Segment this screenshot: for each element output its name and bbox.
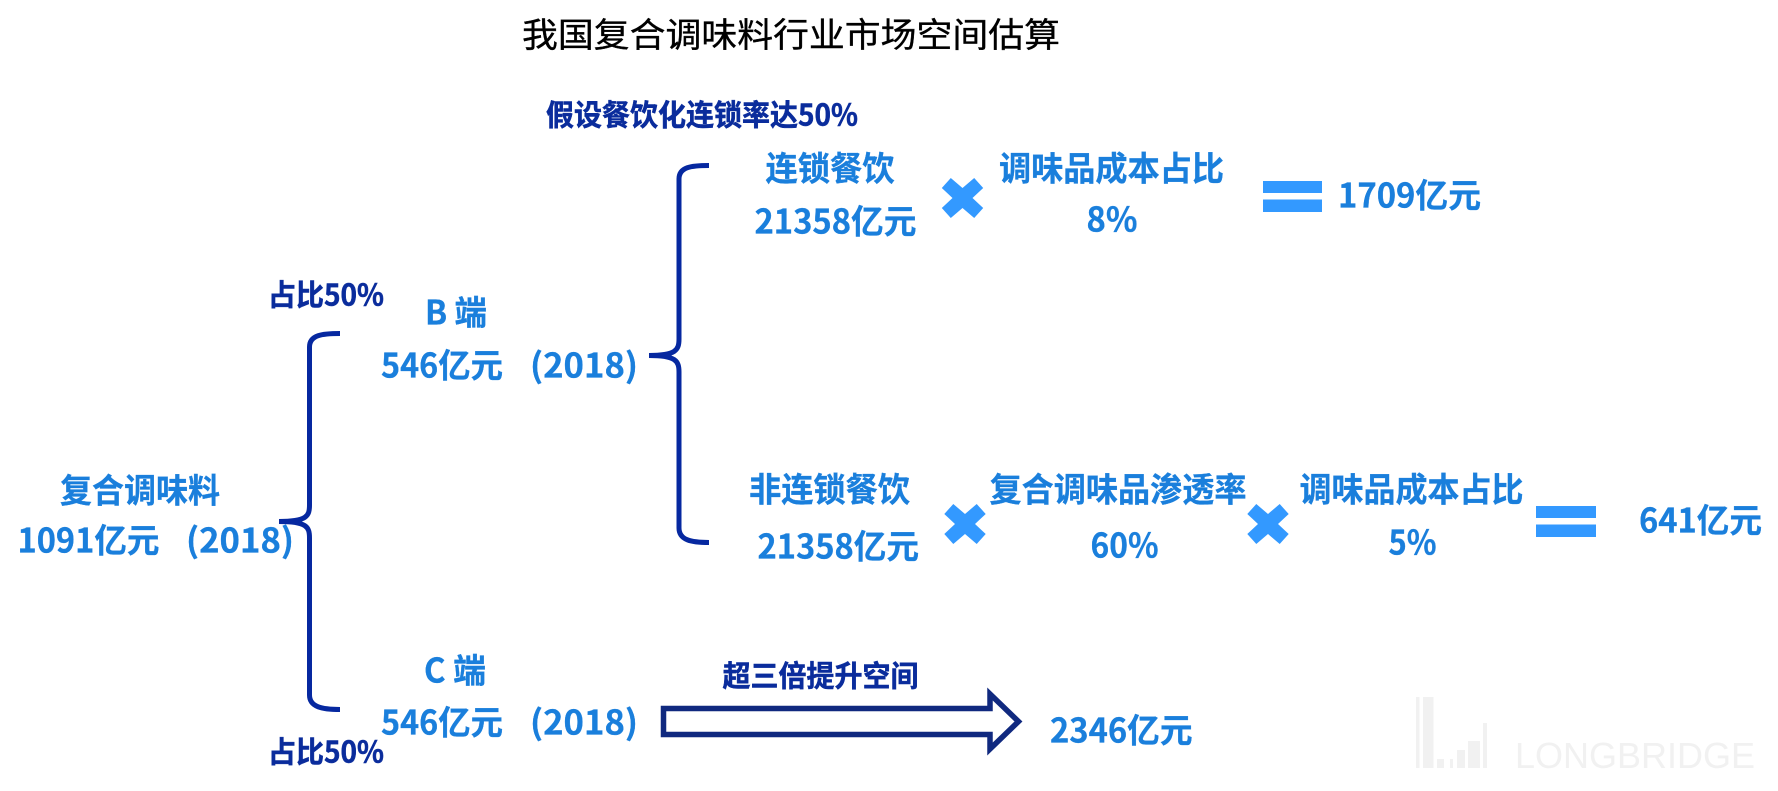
icon: multiply (1247, 504, 1289, 544)
title: 我国复合调味料行业市场空间估算 (522, 8, 1060, 57)
root year: (2018) (186, 514, 294, 562)
penetration value: 60% (1090, 518, 1158, 568)
icon: equals (1536, 506, 1596, 537)
seasoning cost share label: 调味品成本占比 (999, 142, 1224, 190)
penetration label: 复合调味品渗透率 (990, 462, 1246, 512)
bracket: B side to chain and non-chain (649, 166, 709, 542)
C side label: C 端 (424, 644, 486, 692)
node: B side (381, 286, 638, 388)
assumption note: chain rate: 假设餐饮化连锁率达50% (546, 92, 858, 134)
arrow: growth to 2346 (664, 694, 1018, 749)
B side value: 546亿元 (381, 338, 503, 388)
share label: C side: 占比50% (268, 730, 384, 772)
root label: 复合调味料 (60, 464, 220, 512)
B side label: B 端 (425, 286, 487, 334)
B side year: (2018) (530, 338, 638, 388)
root value: 1091亿元 (18, 514, 160, 562)
seasoning cost share value: 8% (1086, 192, 1138, 242)
chain result: 1709亿元 (1338, 168, 1481, 218)
watermark wordmark: LONGBRIDGE (1515, 735, 1755, 776)
node: C side (381, 644, 638, 744)
bracket: root to B and C (279, 334, 340, 710)
chain label: 连锁餐饮 (766, 142, 895, 190)
seasoning cost share label: 调味品成本占比 (1300, 462, 1524, 512)
non-chain label: 非连锁餐饮 (749, 462, 910, 512)
seasoning cost share value: 5% (1388, 516, 1436, 564)
share label: B side: 占比50% (268, 272, 384, 314)
non-chain result: 641亿元 (1639, 494, 1762, 542)
non-chain value: 21358亿元 (758, 520, 919, 568)
C side projected value: 2346亿元 (1050, 704, 1192, 752)
icon: multiply (942, 178, 983, 218)
watermark: Longbridge (1416, 697, 1755, 776)
chain value: 21358亿元 (754, 194, 916, 244)
growth label: 超三倍提升空间 (722, 654, 918, 696)
formula: non-chain restaurants (749, 462, 1762, 568)
root node: compound seasoning market (18, 464, 294, 562)
formula: chain restaurants (754, 142, 1481, 244)
C side value: 546亿元 (381, 696, 503, 744)
icon: equals (1263, 181, 1322, 212)
C side year: (2018) (530, 696, 638, 744)
icon: multiply (944, 504, 986, 544)
watermark bars (1416, 697, 1487, 768)
